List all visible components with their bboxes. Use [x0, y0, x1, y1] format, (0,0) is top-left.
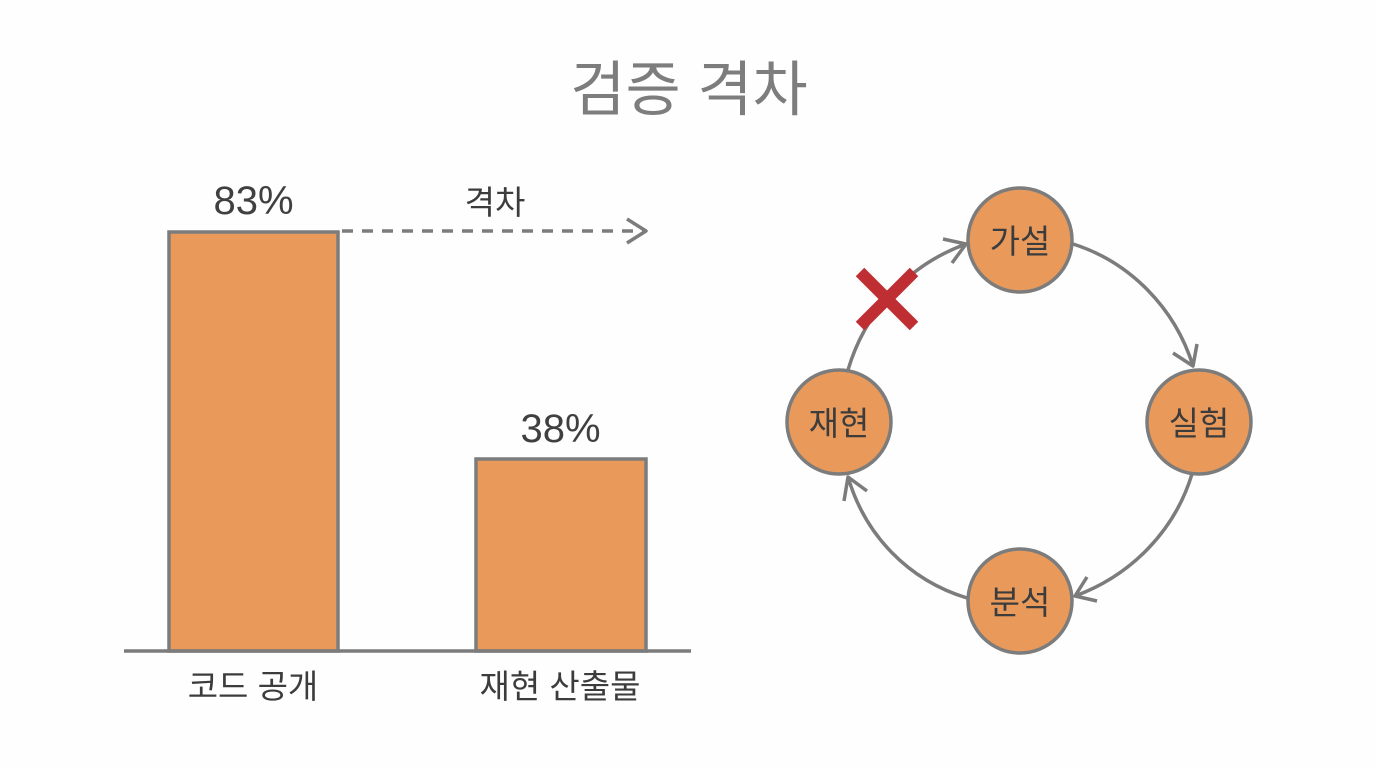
bar chart [124, 179, 691, 705]
bar: code release [169, 232, 338, 651]
arrow: hypothesis to experiment [1073, 244, 1197, 366]
node: reproduction: 재현 [809, 405, 869, 442]
node: hypothesis: 가설 [990, 223, 1050, 260]
arrow: experiment to analysis [1075, 474, 1192, 601]
title: 검증 격차 [570, 56, 808, 124]
node: experiment [1147, 370, 1251, 474]
node: experiment: 실험 [1169, 405, 1229, 442]
value label 38%: 38% [520, 407, 601, 451]
bar: reproduction artifacts [476, 459, 646, 651]
value label 83%: 83% [213, 179, 294, 223]
broken link mark [860, 272, 914, 326]
node: analysis: 분석 [990, 584, 1050, 621]
gap label: 격차 [465, 184, 525, 221]
category label: reproduction artifacts: 재현 산출물 [480, 668, 640, 705]
node: hypothesis [968, 188, 1072, 292]
node: reproduction [787, 370, 891, 474]
node: analysis [968, 549, 1072, 653]
baseline axis [124, 649, 691, 653]
cycle diagram [787, 188, 1251, 653]
category label: code release: 코드 공개 [188, 668, 318, 705]
arrow: analysis to reproduction [844, 477, 967, 598]
arrow: reproduction to hypothesis [848, 239, 966, 370]
gap arrow [342, 219, 646, 243]
